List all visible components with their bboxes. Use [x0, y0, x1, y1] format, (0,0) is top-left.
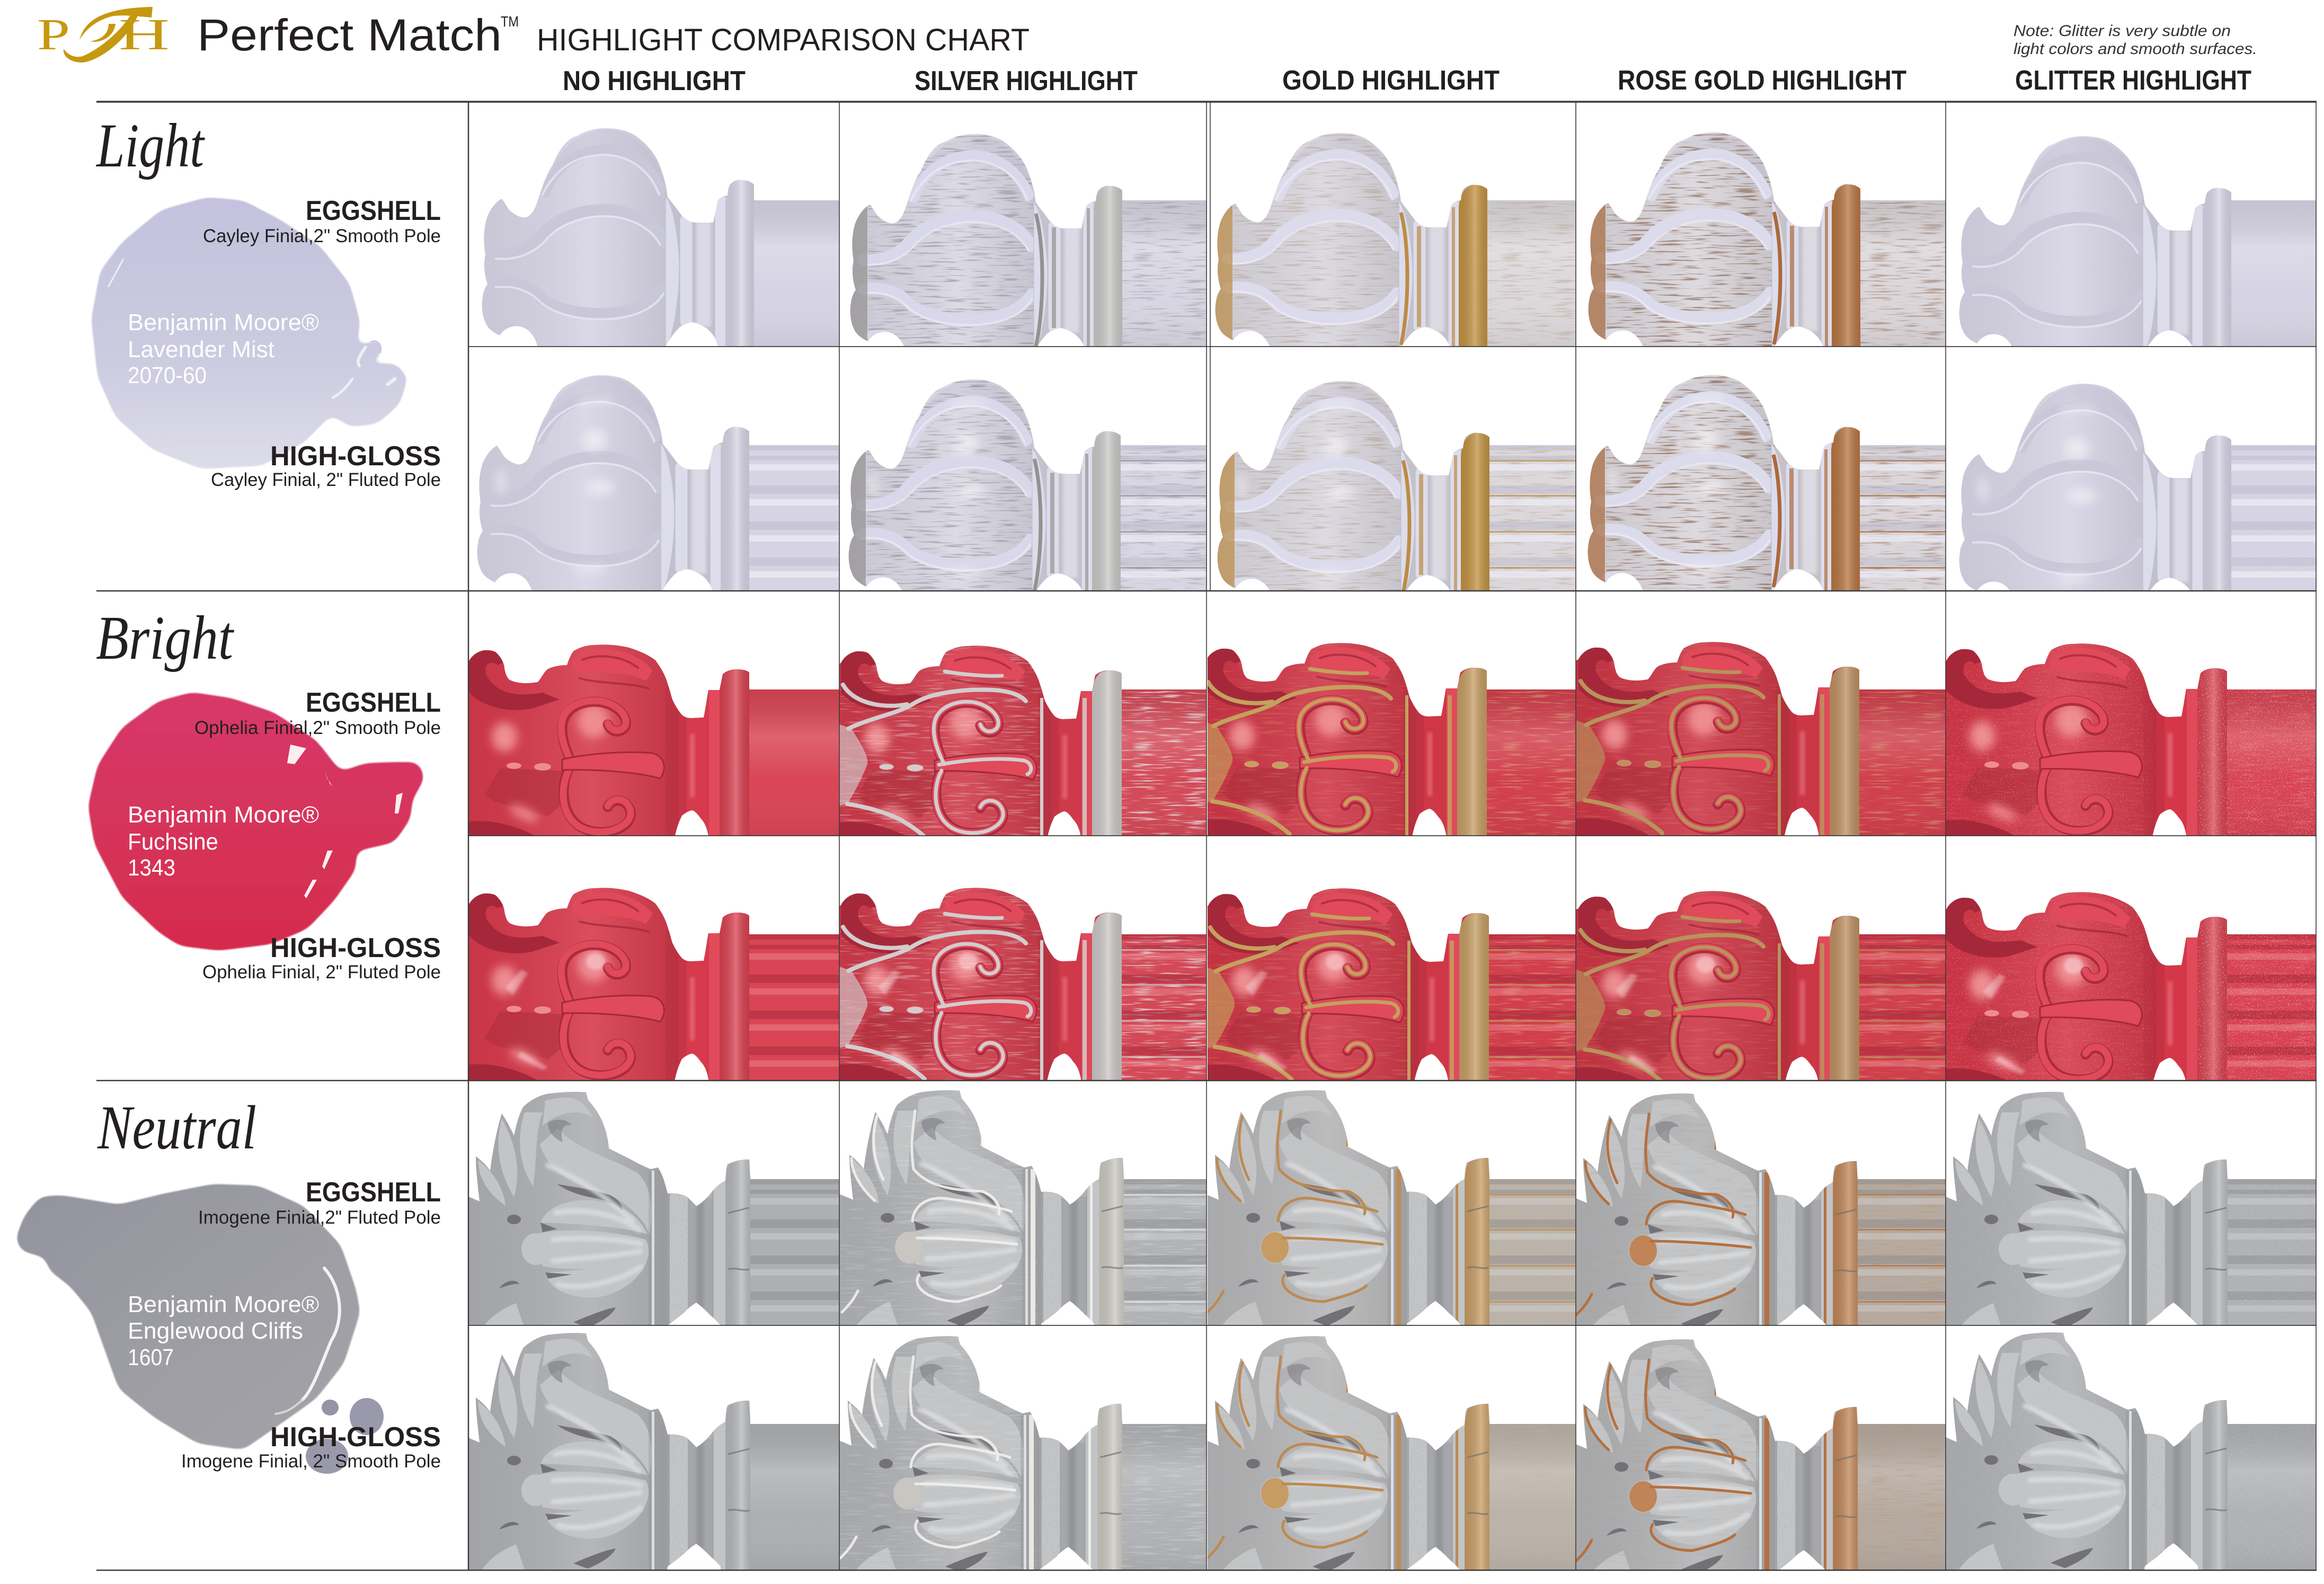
label: Bright high-gloss [202, 933, 441, 983]
finial: Light eggshell, rose gold highlight [1589, 132, 1946, 347]
finial: Neutral high-gloss, silver highlight [824, 1335, 1216, 1584]
finial: Bright eggshell, no highlight [469, 644, 839, 835]
column headings: NO HIGHLIGHT [563, 66, 746, 96]
finial: Light eggshell, no highlight [482, 128, 839, 347]
finial: Light high-gloss, gold highlight [1218, 381, 1576, 590]
paint name: Fuchsine [128, 802, 319, 881]
finial: Light eggshell, silver highlight [850, 134, 1206, 347]
note about glitter: Note: Glitter is very subtle on [2013, 22, 2231, 40]
label: Neutral eggshell: EGGSHELL [306, 1177, 441, 1208]
finial: Light eggshell, gold highlight [1216, 133, 1576, 347]
paint name: Lavender Mist: Benjamin Moore® [128, 309, 319, 335]
paint name: Englewood Cliffs: 1607 [128, 1344, 174, 1370]
column headings: SILVER HIGHLIGHT [915, 66, 1138, 96]
finial: Light eggshell, glitter highlight [1959, 136, 2316, 347]
finial: Bright eggshell, rose gold highlight [1563, 641, 1952, 859]
label: Bright eggshell: EGGSHELL [306, 687, 441, 718]
label: Light eggshell: Cayley Finial,2" Smooth Pole [203, 226, 441, 246]
finial: Light high-gloss, silver highlight [849, 379, 1206, 590]
finial: Neutral eggshell, no highlight [453, 1091, 845, 1349]
paint swatch: Englewood Cliffs [15, 1184, 384, 1474]
finial: Neutral high-gloss, no highlight [453, 1332, 845, 1584]
paint name: Fuchsine: Benjamin Moore® [128, 802, 319, 828]
paint name: Englewood Cliffs: Englewood Cliffs [128, 1318, 303, 1344]
finial: Bright high-gloss, silver highlight [825, 887, 1216, 1104]
trademark mark: TM [501, 13, 519, 30]
finial: Neutral high-gloss, gold highlight [1192, 1335, 1584, 1584]
label: Neutral high-gloss [181, 1422, 441, 1472]
logo: PJH monogram: H [119, 10, 170, 59]
subtitle: HIGHLIGHT COMPARISON CHART [537, 23, 1030, 57]
paint name: Lavender Mist: Lavender Mist [128, 337, 274, 362]
label: Bright eggshell [194, 687, 441, 738]
finial: Bright high-gloss, glitter highlight [1930, 891, 2322, 1107]
logo: PJH monogram [37, 7, 170, 63]
row heading: Light: Light [95, 111, 206, 180]
finial: Bright eggshell, glitter highlight [1930, 643, 2322, 859]
finial: Light high-gloss, no highlight [477, 375, 839, 590]
label: Neutral eggshell: Imogene Finial,2" Fluted Pole [198, 1207, 441, 1228]
finial: Neutral eggshell, silver highlight [826, 1090, 1216, 1349]
paint name: Fuchsine: Fuchsine [128, 829, 218, 855]
paint name: Lavender Mist [128, 309, 319, 388]
label: Light high-gloss: Cayley Finial, 2" Fluted Pole [211, 470, 441, 490]
label: Bright high-gloss: HIGH-GLOSS [270, 933, 441, 963]
label: Bright high-gloss: Ophelia Finial, 2" Fluted Pole [202, 962, 441, 983]
row heading: Bright: Bright [96, 603, 235, 672]
finial: Neutral high-gloss, glitter highlight [1930, 1332, 2322, 1584]
note about glitter: light colors and smooth surfaces. [2013, 40, 2257, 58]
paint swatch: Lavender Mist [91, 197, 408, 469]
label: Neutral eggshell [198, 1177, 441, 1228]
paint name: Englewood Cliffs [128, 1291, 319, 1370]
paint name: Lavender Mist: 2070-60 [128, 362, 207, 388]
finial: Bright high-gloss, rose gold highlight [1563, 890, 1952, 1105]
finial: Light high-gloss, rose gold highlight [1587, 375, 1946, 590]
paint swatch: Fuchsine [88, 692, 425, 951]
finial: Neutral eggshell, glitter highlight [1930, 1091, 2322, 1349]
column headings: ROSE GOLD HIGHLIGHT [1618, 65, 1906, 96]
finial: Light high-gloss, glitter highlight [1959, 384, 2316, 590]
title: Perfect Match: Perfect Match [197, 10, 502, 60]
finial: Bright eggshell, silver highlight [825, 645, 1216, 860]
finial: Bright high-gloss, no highlight [453, 887, 845, 1104]
column headings: GLITTER HIGHLIGHT [2015, 65, 2251, 96]
finial: Bright eggshell, gold highlight [1190, 642, 1584, 859]
finial: Neutral high-gloss, rose gold highlight [1560, 1339, 1952, 1584]
label: Light eggshell [203, 196, 441, 246]
column headings: GOLD HIGHLIGHT [1282, 65, 1500, 96]
logo: PJH monogram: P [37, 10, 70, 59]
label: Bright eggshell: Ophelia Finial,2" Smooth Pole [194, 718, 441, 738]
finial: Neutral eggshell, gold highlight [1192, 1090, 1584, 1349]
note about glitter [2013, 22, 2257, 58]
label: Neutral high-gloss: HIGH-GLOSS [270, 1422, 441, 1453]
row heading: Neutral: Neutral [97, 1093, 256, 1162]
label: Light eggshell: EGGSHELL [306, 196, 441, 226]
column headings [563, 65, 2251, 96]
paint name: Fuchsine: 1343 [128, 855, 175, 881]
paint name: Englewood Cliffs: Benjamin Moore® [128, 1291, 319, 1317]
label: Light high-gloss [211, 441, 441, 490]
label: Neutral high-gloss: Imogene Finial, 2" Smooth Pole [181, 1451, 441, 1472]
finial: Bright high-gloss, gold highlight [1192, 888, 1584, 1104]
finial: Neutral eggshell, rose gold highlight [1560, 1093, 1952, 1350]
label: Light high-gloss: HIGH-GLOSS [270, 441, 441, 472]
